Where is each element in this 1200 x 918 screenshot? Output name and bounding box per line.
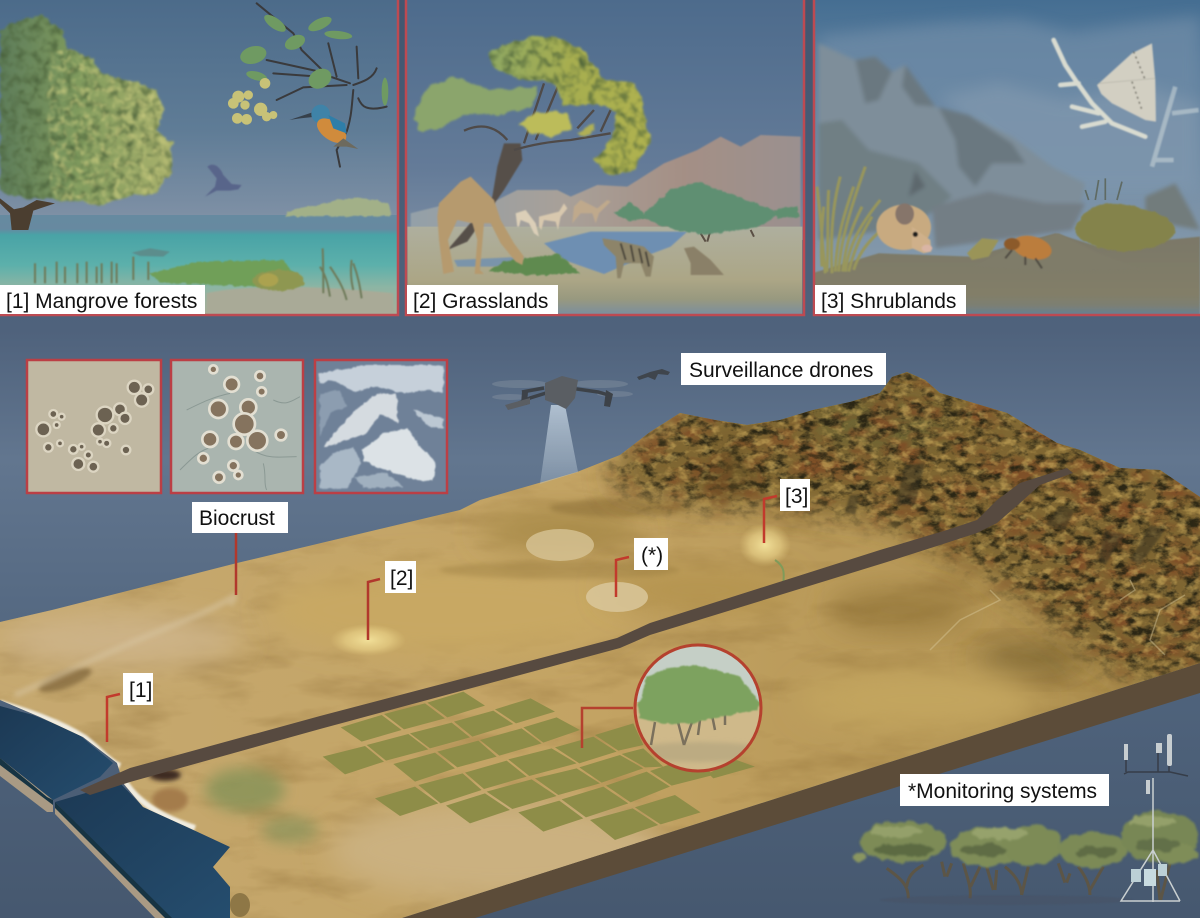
illustration: monitoring trees: [852, 811, 1198, 905]
label: [3]: [3]: [785, 485, 808, 508]
label: grasslands: [2] Grasslands: [413, 290, 548, 313]
icon: gazelles: [516, 200, 611, 237]
callout: shrub plot zoom: [582, 640, 770, 776]
label: [1]: [1]: [129, 679, 152, 702]
label: surveillance drones: [681, 353, 886, 385]
sea block 2: [55, 783, 230, 918]
trench wall: [80, 468, 1073, 795]
icon: mangrove tree: [0, 13, 177, 230]
mountains: [411, 135, 801, 233]
small grass: [967, 238, 999, 260]
icon: main surveillance drone: [492, 376, 633, 410]
label: biocrust: Biocrust: [199, 507, 275, 530]
seagrass: [35, 248, 393, 313]
icon: acacia shrub: [614, 182, 800, 242]
label: (*): [616, 538, 668, 597]
icon: beetle: [1004, 232, 1054, 268]
panel: biocrust photo 1: [27, 360, 161, 493]
label: (*): (*): [641, 544, 663, 567]
label: mangrove forests: [1] Mangrove forests: [6, 290, 197, 313]
fish shadow: [132, 248, 170, 257]
icon: monitoring tower: [1121, 734, 1188, 902]
sites: [526, 529, 594, 561]
mountain range: [610, 360, 1200, 680]
label: [1]: [107, 673, 153, 742]
icon: camel: [437, 177, 524, 274]
shore foam: [0, 703, 195, 828]
icon: butterfly on branch: [1054, 40, 1199, 167]
callout: drone beam: [540, 405, 578, 484]
ground: [812, 233, 1200, 315]
icon: kingfisher: [289, 105, 358, 149]
side wall: sea block 1: [0, 758, 53, 812]
icon: small drone: [637, 369, 670, 380]
panel: biocrust photo 3: [315, 360, 447, 493]
panel: mangrove forests: [0, 0, 398, 315]
icon: shrub: [1075, 178, 1175, 251]
grass tuft: [817, 167, 885, 273]
pond: [544, 232, 687, 274]
label: monitoring systems: *Monitoring systems: [908, 780, 1097, 803]
icon: flying heron: [205, 165, 242, 197]
terrain block: [0, 372, 1200, 918]
label: shrublands: [3] Shrublands: [821, 290, 956, 313]
grass: [489, 253, 581, 275]
label: [2]: [368, 561, 416, 640]
icon: mouse: [876, 203, 932, 253]
icon: branch with fruits: [228, 3, 388, 167]
panel: shrublands: [812, 0, 1200, 315]
label: monitoring systems: [900, 774, 1109, 806]
side wall: sea block 2: [55, 802, 170, 918]
icon: acacia tree: [414, 33, 654, 250]
ground: [407, 227, 802, 315]
side wall: front edge: [402, 663, 1200, 918]
biocrust stream: [15, 595, 236, 695]
sea block 1: [0, 706, 113, 800]
label: [3]: [764, 479, 810, 543]
icon: hyenas: [602, 238, 724, 278]
coastal vegetation: [36, 663, 318, 917]
panel: biocrust photo 2: [171, 360, 303, 493]
label: biocrust: [192, 502, 288, 595]
label: surveillance drones: Surveillance drones: [689, 359, 873, 382]
experimental plots: [323, 692, 755, 840]
land surface: [0, 372, 1200, 918]
panel: grasslands: [406, 0, 804, 315]
distant mountains: [820, 14, 1200, 96]
label: [2]: [2]: [390, 567, 413, 590]
island: [285, 198, 391, 217]
